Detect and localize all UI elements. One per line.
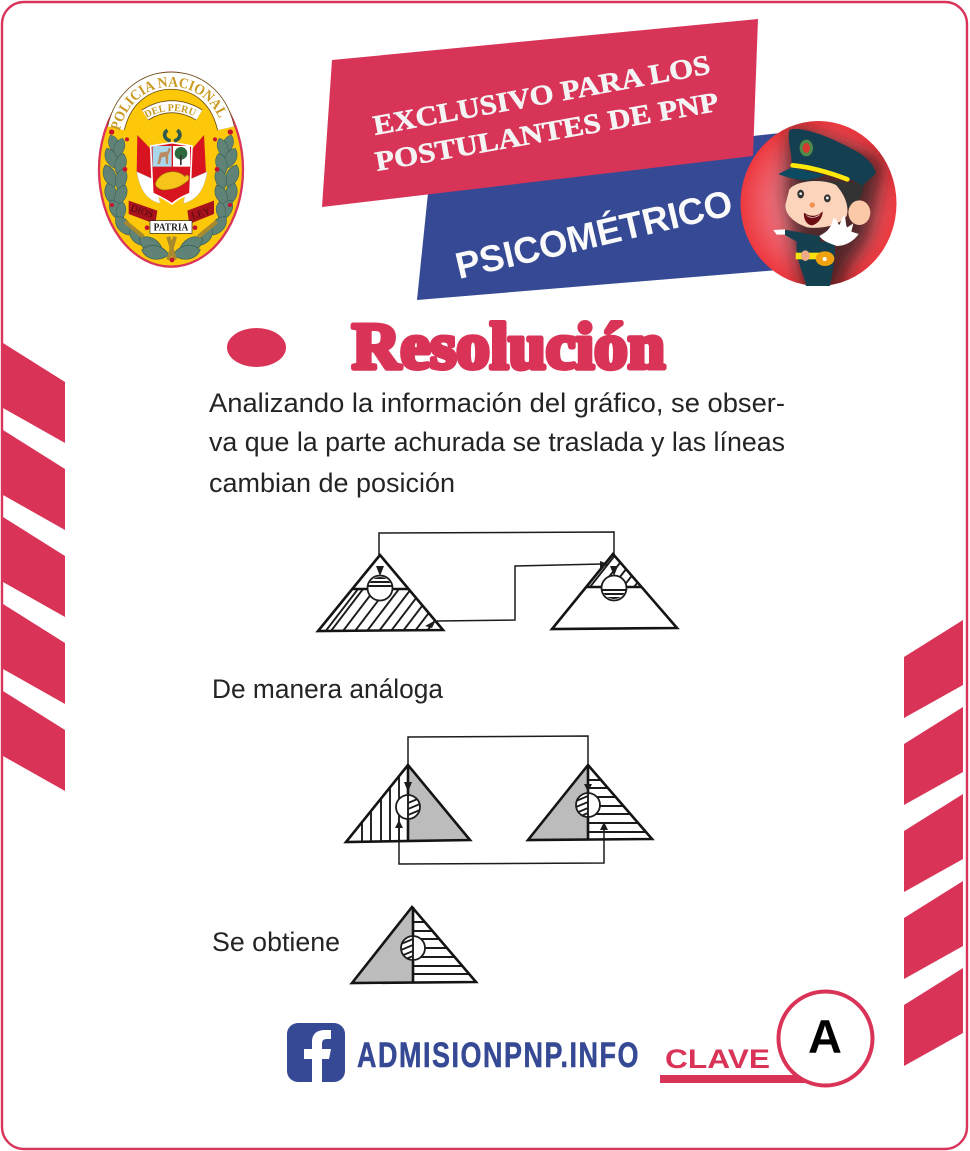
pointing arm <box>783 229 820 243</box>
explanation paragraph: va que la parte achurada se traslada y las líneas <box>209 427 785 457</box>
crossed rifles <box>125 222 217 260</box>
bullet ellipse <box>227 328 286 367</box>
diagram: result triangle <box>352 907 482 983</box>
triangle A <box>408 765 470 841</box>
crest name text: POLICIA NACIONAL <box>110 77 226 131</box>
flags <box>137 135 207 203</box>
arrows <box>376 566 384 576</box>
answer label: CLAVE <box>665 1044 770 1074</box>
crest oval <box>99 73 243 267</box>
crest inner band text: DEL PERU <box>144 104 197 118</box>
mouth <box>804 211 823 225</box>
website address: ADMISIONPNP.INFO <box>357 1036 640 1075</box>
right triangle <box>552 554 677 629</box>
belt <box>796 253 827 259</box>
explanation paragraph: Analizando la información del gráfico, se obser- <box>209 388 785 418</box>
figure shadow <box>785 125 885 295</box>
officer figure <box>773 129 876 286</box>
left triangle hatch <box>325 590 435 630</box>
result caption: Se obtiene <box>212 927 340 957</box>
belt pouch <box>816 251 834 266</box>
body <box>796 242 835 286</box>
red banner <box>322 19 758 207</box>
answer letter: A <box>808 1010 842 1063</box>
blue banner <box>417 132 790 300</box>
crest outer white band <box>116 81 226 128</box>
heading line one: EXCLUSIVO PARA LOS <box>371 50 713 142</box>
raised glove <box>819 216 859 246</box>
right circle <box>602 576 626 600</box>
cap crown <box>789 129 876 185</box>
ear <box>848 200 870 225</box>
connector lines <box>379 532 614 555</box>
cap brim <box>778 167 825 180</box>
DIOS ribbon <box>129 201 157 224</box>
PATRIA ribbon: PATRIA <box>154 223 189 234</box>
section title: Resolución <box>352 310 665 383</box>
police crest emblem <box>98 72 244 268</box>
right decorative stripes <box>904 620 963 1066</box>
explanation paragraph <box>209 388 785 498</box>
belt buckle <box>801 250 810 261</box>
left circle <box>368 576 392 600</box>
answer underline <box>660 1075 805 1083</box>
icon: facebook <box>287 1023 345 1082</box>
DIOS ribbon: DIOS <box>129 203 155 221</box>
banner heading <box>371 50 721 178</box>
answer circle <box>778 992 872 1086</box>
LEY ribbon: LEY <box>190 206 212 222</box>
hair <box>793 178 864 210</box>
pointing hand <box>773 229 785 235</box>
left wreath <box>100 129 170 262</box>
right wreath <box>172 129 242 262</box>
eyes <box>797 190 831 202</box>
diagram: second analogy <box>346 736 658 864</box>
cap band <box>793 165 847 179</box>
connector lines <box>408 736 588 765</box>
left triangle <box>318 555 443 631</box>
cap badge <box>800 140 813 156</box>
subject label: PSICOMÉTRICO <box>451 182 736 287</box>
top wreath ornament <box>165 130 180 141</box>
face <box>785 181 847 228</box>
right triangle hatch <box>590 556 638 586</box>
shield <box>151 143 192 204</box>
left decorative stripes <box>3 343 65 791</box>
police officer badge <box>740 121 896 295</box>
heading line two: POSTULANTES DE PNP <box>373 87 721 178</box>
explanation paragraph: cambian de posición <box>209 468 455 498</box>
LEY ribbon <box>187 201 214 224</box>
analogy caption: De manera análoga <box>212 674 444 704</box>
triangle B <box>528 765 588 840</box>
nose <box>810 202 815 208</box>
answer key <box>660 992 872 1086</box>
crest inner white band <box>145 107 199 115</box>
red circle <box>740 121 896 286</box>
diagram: first analogy <box>318 532 677 641</box>
